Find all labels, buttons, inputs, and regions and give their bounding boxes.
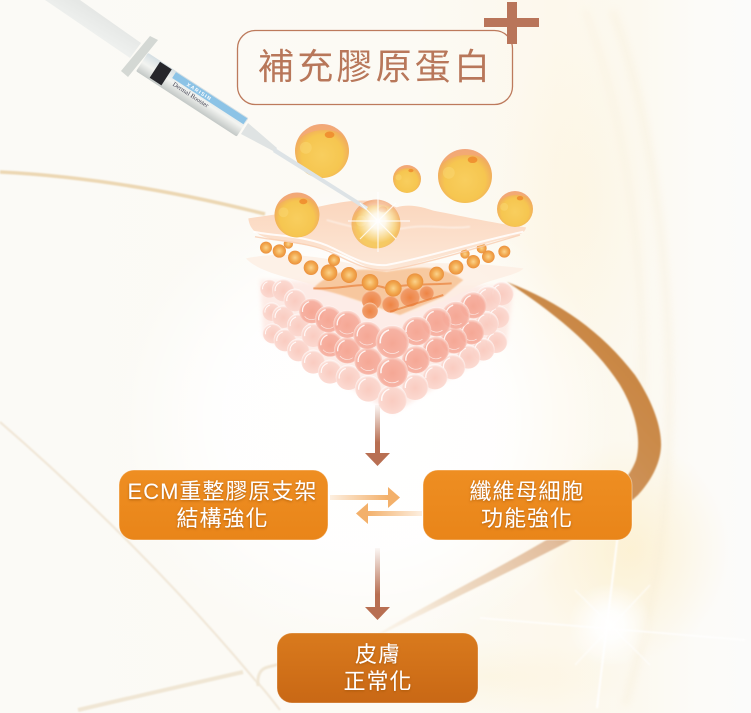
box text: 皮膚: [355, 642, 401, 667]
box: fibroblast: [423, 470, 632, 540]
plunger: [45, 0, 141, 58]
bubble cluster: [260, 279, 514, 414]
blue label: [172, 72, 247, 124]
title box: [238, 30, 512, 104]
box: skin normalised: [277, 633, 478, 703]
box text: ECM重整膠原支架: [128, 479, 317, 504]
injection flare: [348, 192, 410, 252]
box text: 功能強化: [481, 506, 573, 531]
flange: [121, 36, 158, 77]
curved band: right swoosh: [360, 282, 661, 645]
curved band: upper left: [0, 172, 265, 214]
upper skin layer: [248, 201, 526, 270]
box text: 纖維母細胞: [469, 479, 585, 504]
syringe: [45, 0, 368, 210]
orange collagen cluster: [313, 268, 463, 319]
icon: plus sign: [484, 2, 539, 44]
title text: 補充膠原蛋白: [258, 46, 493, 87]
beads: [260, 239, 510, 297]
arrow: left: [356, 503, 422, 524]
needle: [273, 148, 368, 210]
barrel: [136, 53, 249, 137]
box text: 結構強化: [176, 506, 269, 531]
box: ECM: [119, 470, 328, 540]
label product text: Dermal Booster: [171, 81, 210, 110]
box text: 正常化: [343, 669, 413, 694]
sparkle: lower right: [480, 500, 745, 708]
lower skin layer: [246, 255, 523, 315]
cell layer diagram: [246, 201, 526, 414]
label brand text: XARISIN: [185, 82, 213, 103]
rubber stopper: [150, 62, 172, 85]
spheres: [274, 124, 533, 248]
arrow: skin to ECM: [365, 405, 390, 466]
arrow: down to skin: [365, 548, 390, 620]
hub: [241, 123, 277, 152]
arrow: right: [330, 487, 400, 508]
